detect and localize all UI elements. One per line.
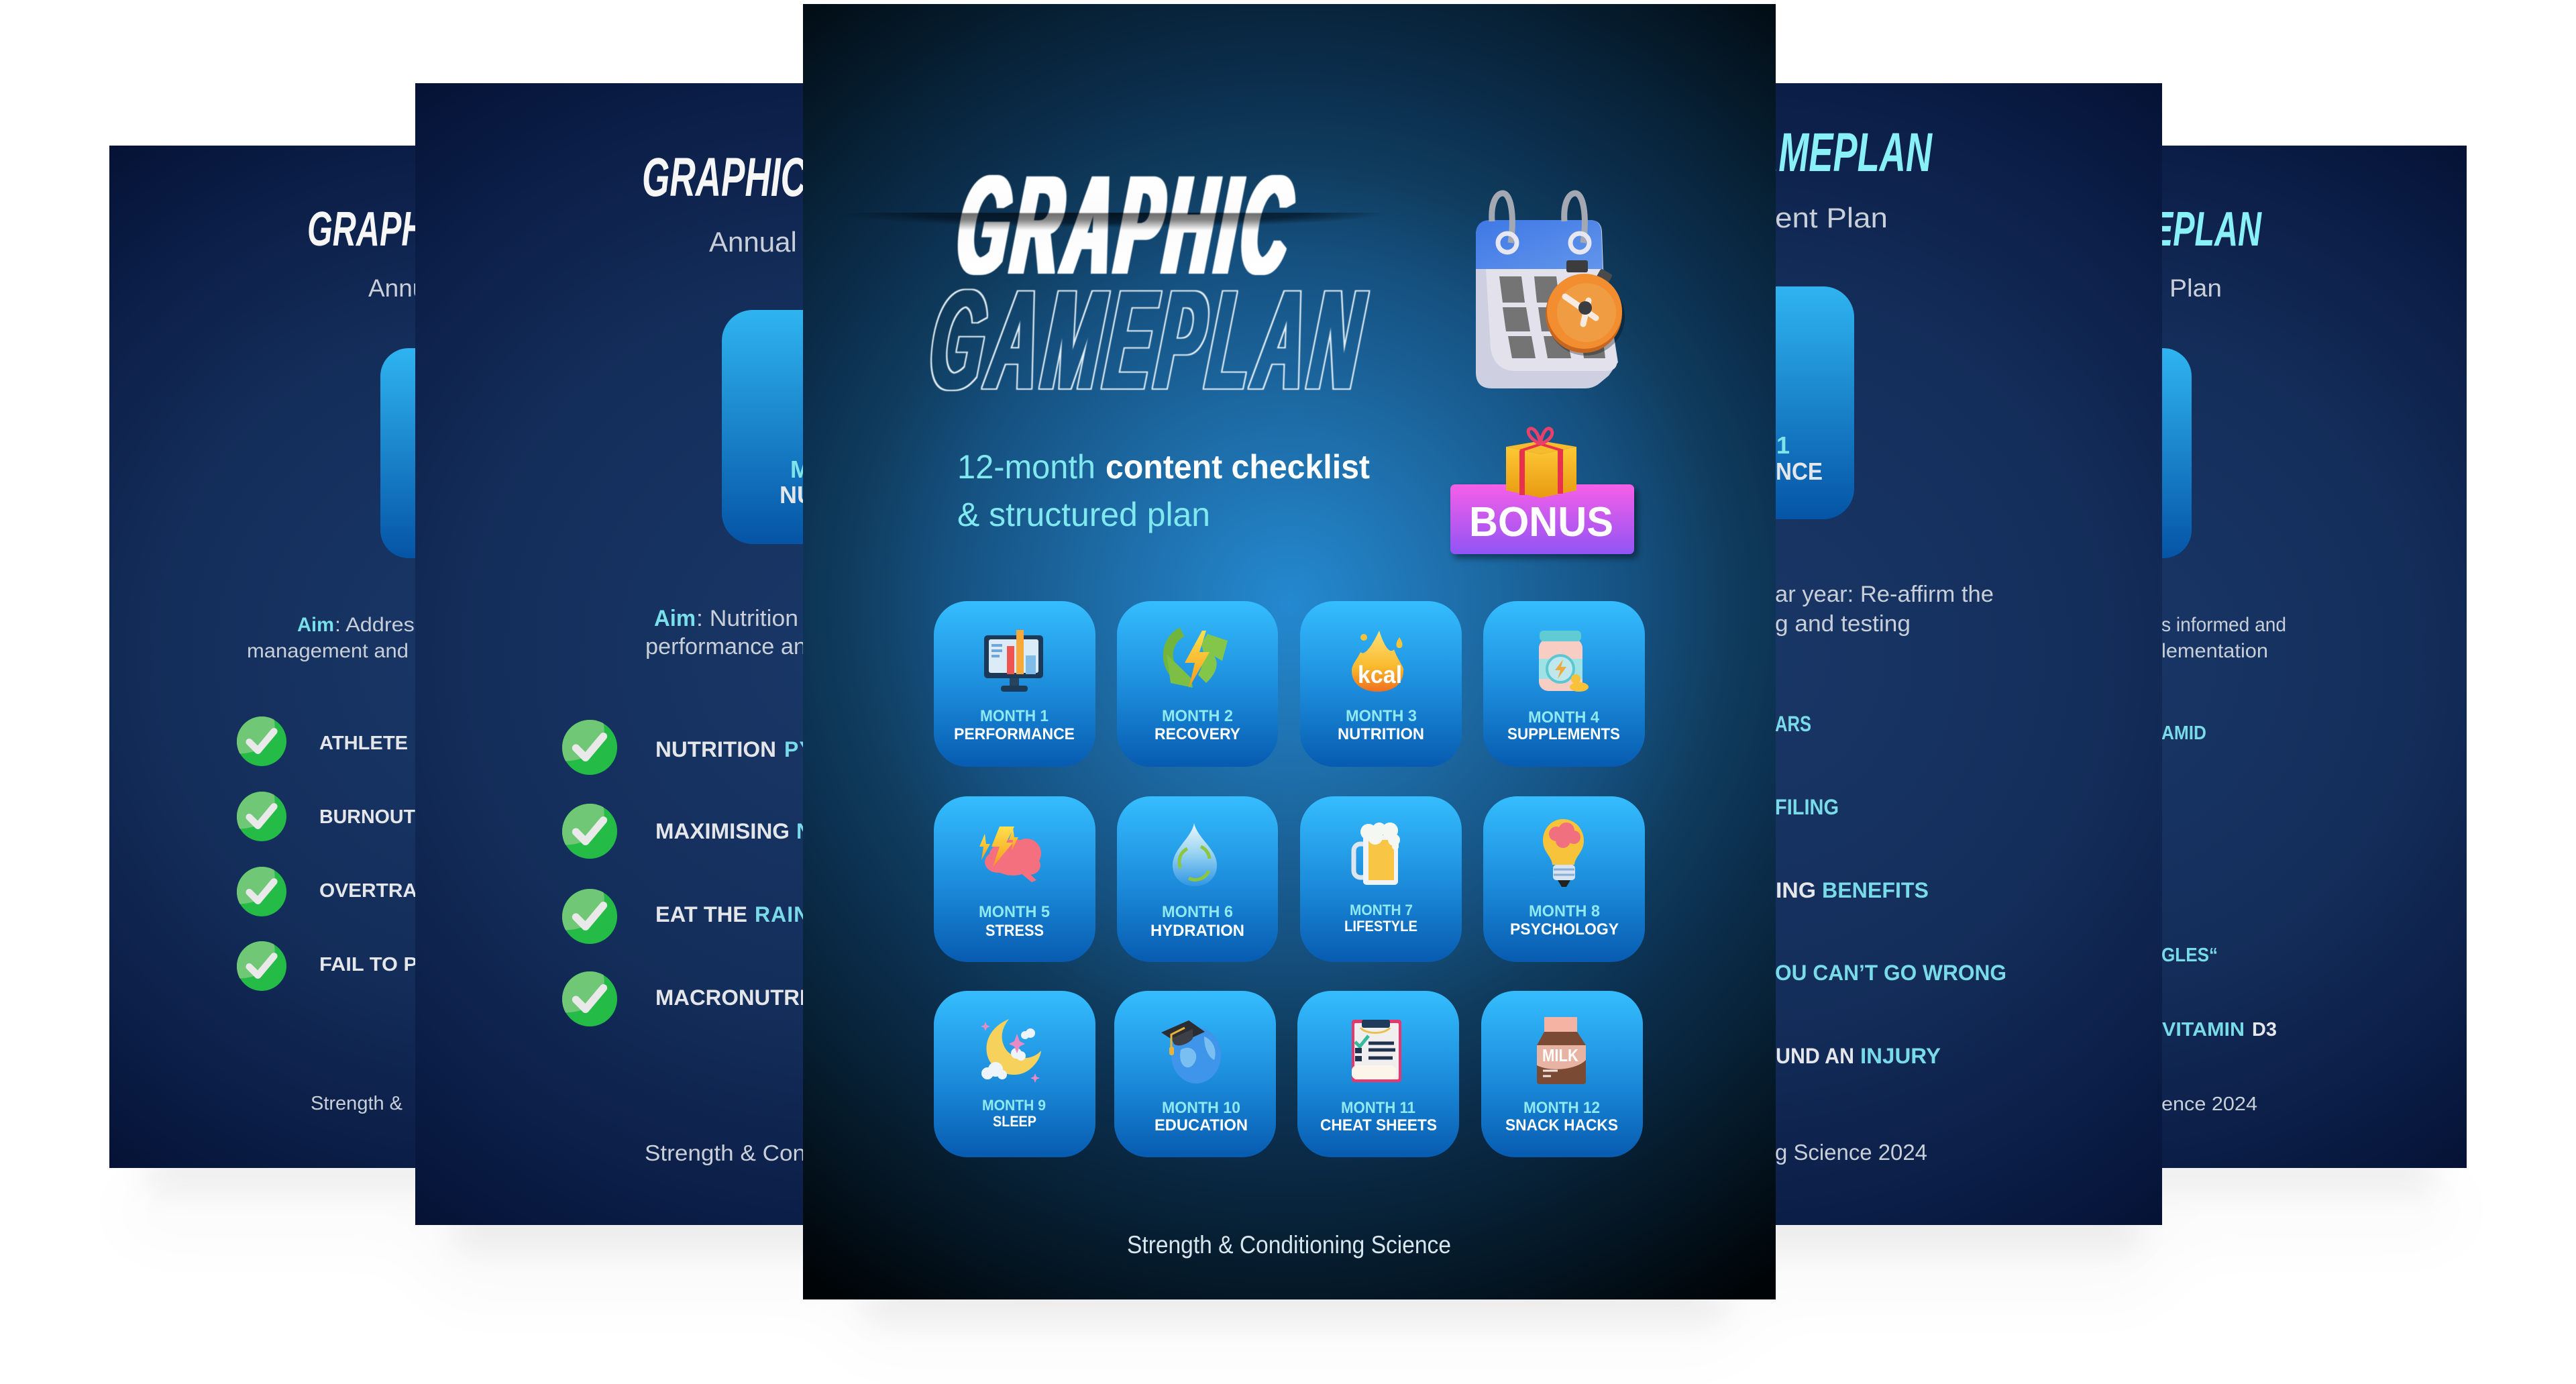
page shadows bbox=[121, 1157, 2462, 1355]
panel: far right sheet, supplements checklist bbox=[1700, 146, 2467, 1168]
tile: month 12 snack hacks: SNACK HACKS bbox=[1505, 1116, 1618, 1134]
icon: water drop bbox=[1173, 823, 1217, 886]
icon: bonus badge with gift: BONUS bbox=[1469, 499, 1613, 545]
footer: Strength & Conditioning Science bbox=[1127, 1231, 1451, 1259]
icon: stressed brain bbox=[979, 827, 1041, 882]
checklist bbox=[1775, 712, 2006, 1068]
aim text: : Nutrition bbox=[696, 606, 798, 631]
tile text: MONTH 10 bbox=[1162, 1099, 1240, 1117]
checklist: INJURY bbox=[1860, 1044, 1941, 1068]
subtitle: & structured plan bbox=[957, 496, 1210, 533]
month tile bbox=[1626, 286, 1854, 519]
checklist: RAIN bbox=[755, 902, 810, 926]
panel: centre cover sheet bbox=[803, 4, 1776, 1299]
tile text: MONTH 9 bbox=[982, 1097, 1046, 1114]
subtitle: content checklist bbox=[1106, 448, 1370, 486]
subtitle: Annual bbox=[368, 274, 445, 302]
aim text: ar year: Re-affirm the bbox=[1775, 582, 1994, 607]
tile: month 8 psychology bbox=[1483, 796, 1645, 962]
tile: month 6 hydration bbox=[1117, 796, 1278, 962]
aim text bbox=[1775, 582, 1994, 637]
checklist: EAT THE bbox=[655, 902, 747, 926]
tile: month 3 nutrition bbox=[1300, 601, 1462, 767]
icon: bonus badge with gift bbox=[1450, 429, 1634, 554]
month tiles bbox=[934, 601, 1645, 1157]
aim text: s informed and bbox=[2161, 614, 2286, 636]
tile text: MONTH 11 bbox=[1341, 1099, 1415, 1117]
footer: Strength & bbox=[311, 1093, 402, 1114]
aim text bbox=[645, 606, 806, 659]
tile: month 10 education: EDUCATION bbox=[1155, 1116, 1248, 1134]
tile: month 4 supplements: SUPPLEMENTS bbox=[1507, 725, 1620, 743]
tile text: MONTH 7 bbox=[1350, 902, 1413, 918]
tile: month 5 stress bbox=[934, 796, 1095, 962]
tile: month 3 nutrition: NUTRITION bbox=[1338, 725, 1424, 743]
tile text: MONTH 5 bbox=[979, 903, 1050, 921]
tile: month 10 education bbox=[1114, 991, 1276, 1157]
tile label: MONTH 3 bbox=[790, 456, 899, 483]
tile text: MONTH 12 bbox=[1523, 1099, 1600, 1117]
tile label: 1 bbox=[1776, 431, 1790, 459]
month tile: NCE bbox=[1776, 458, 1823, 485]
checklist bbox=[2161, 723, 2277, 1041]
icon: recovery bolt bbox=[1167, 631, 1228, 688]
tile text: MONTH 6 bbox=[1162, 903, 1233, 921]
tile text: MONTH 1 bbox=[980, 707, 1049, 725]
footer: Strength & Con bbox=[645, 1140, 806, 1165]
icon: supplement jar bbox=[1539, 631, 1589, 692]
subtitle: Plan bbox=[2169, 274, 2222, 302]
icon: globe with cap bbox=[1161, 1020, 1221, 1083]
tile: month 7 lifestyle bbox=[1300, 796, 1462, 962]
footer: g Science 2024 bbox=[1775, 1140, 1927, 1165]
tile: month 2 recovery: RECOVERY bbox=[1155, 725, 1240, 743]
checklist bbox=[562, 720, 814, 1026]
tile: month 5 stress: STRESS bbox=[985, 922, 1044, 940]
checklist: VITAMIN bbox=[2162, 1019, 2245, 1041]
icon: milk carton: MILK bbox=[1542, 1045, 1578, 1065]
icon: monitor chart bbox=[984, 630, 1043, 692]
icon: clipboard bbox=[1352, 1020, 1401, 1082]
checklist: D3 bbox=[2252, 1019, 2277, 1041]
aim text: management and bbox=[247, 640, 409, 662]
panel: centre cover sheet: GRAPHIC bbox=[951, 148, 1303, 303]
icon: kcal flame bbox=[1352, 631, 1403, 692]
heading: brush title: GAMEPLAN bbox=[1724, 122, 1933, 183]
tile text: MONTH 8 bbox=[1529, 902, 1600, 920]
aim text: Aim bbox=[654, 606, 696, 631]
aim text bbox=[247, 614, 425, 662]
tile: month 6 hydration: HYDRATION bbox=[1150, 922, 1244, 940]
subtitle: ent Plan bbox=[1775, 202, 1888, 233]
panel: left sheet, nutrition checklist bbox=[415, 83, 1271, 1225]
checklist: BURNOUT bbox=[319, 806, 415, 828]
aim text bbox=[2161, 614, 2286, 662]
aim text: : Address bbox=[335, 614, 425, 636]
icon: calendar with clock bbox=[1476, 193, 1625, 388]
aim text: Aim bbox=[297, 614, 334, 636]
checklist: ING bbox=[1776, 878, 1816, 902]
icon: moon and clouds bbox=[981, 1019, 1041, 1083]
tile: month 11 cheat sheets bbox=[1297, 991, 1459, 1157]
tile text: MONTH 2 bbox=[1162, 707, 1233, 725]
subtitle: Annual bbox=[709, 226, 797, 258]
checklist: ARS bbox=[1775, 712, 1811, 736]
aim text: lementation bbox=[2161, 640, 2268, 662]
tile text: MONTH 3 bbox=[1346, 707, 1417, 725]
checklist: AMID bbox=[2161, 723, 2206, 744]
heading: brush title: GRAPHIC bbox=[307, 203, 458, 256]
checklist: BENEFITS bbox=[1822, 878, 1929, 902]
subtitle: 12-month bbox=[957, 448, 1095, 486]
icon: milk carton bbox=[1537, 1017, 1586, 1084]
icon: kcal flame: kcal bbox=[1358, 661, 1402, 688]
heading: brush title: GAMEPLAN bbox=[2076, 203, 2262, 256]
tile: month 2 recovery bbox=[1117, 601, 1278, 767]
tile: month 1 performance bbox=[934, 601, 1095, 767]
checklist: N bbox=[796, 819, 812, 843]
aim text: g and testing bbox=[1775, 611, 1911, 637]
checklist: FILING bbox=[1775, 795, 1839, 819]
month tile bbox=[1990, 348, 2192, 558]
checklist: FAIL TO P bbox=[319, 954, 417, 975]
tile: month 7 lifestyle: LIFESTYLE bbox=[1344, 918, 1417, 935]
footer: ence 2024 bbox=[2161, 1094, 2257, 1115]
aim text: performance an bbox=[645, 634, 806, 659]
subtitle bbox=[957, 448, 1370, 533]
panel: far left sheet, month 4 checklist bbox=[109, 146, 876, 1168]
title streak bbox=[865, 213, 1374, 227]
checklist: OVERTRA bbox=[319, 880, 417, 902]
panel: right sheet, performance checklist bbox=[1306, 83, 2162, 1225]
checklist: UND AN bbox=[1776, 1044, 1854, 1068]
checklist: MACRONUTRI bbox=[655, 986, 806, 1010]
checklist: MAXIMISING bbox=[655, 819, 790, 843]
tile text: MONTH 4 bbox=[1528, 708, 1600, 727]
icon: beer mug bbox=[1354, 822, 1400, 885]
icon: brain bulb bbox=[1543, 819, 1584, 887]
tile: month 1 performance: PERFORMANCE bbox=[954, 725, 1075, 743]
checklist: OU CAN’T GO WRONG bbox=[1775, 961, 2006, 985]
checklist: ATHLETE bbox=[319, 733, 408, 754]
heading: brush title: GRAPHIC bbox=[642, 147, 807, 208]
tile: month 12 snack hacks bbox=[1481, 991, 1643, 1157]
tile: month 9 sleep bbox=[934, 991, 1095, 1157]
tile: month 9 sleep: SLEEP bbox=[993, 1113, 1036, 1130]
tile: month 11 cheat sheets: CHEAT SHEETS bbox=[1320, 1116, 1437, 1134]
checklist bbox=[237, 716, 417, 991]
month tile bbox=[722, 310, 950, 544]
month tile bbox=[380, 348, 582, 558]
month tile: NUTRITION bbox=[780, 481, 911, 509]
tile: month 4 supplements bbox=[1483, 601, 1645, 767]
checklist: NUTRITION bbox=[655, 737, 776, 761]
checklist: PY bbox=[784, 737, 814, 761]
tile: month 8 psychology: PSYCHOLOGY bbox=[1510, 920, 1619, 939]
panel: centre cover sheet: GAMEPLAN bbox=[924, 261, 1375, 419]
checklist: GLES“ bbox=[2161, 945, 2218, 966]
